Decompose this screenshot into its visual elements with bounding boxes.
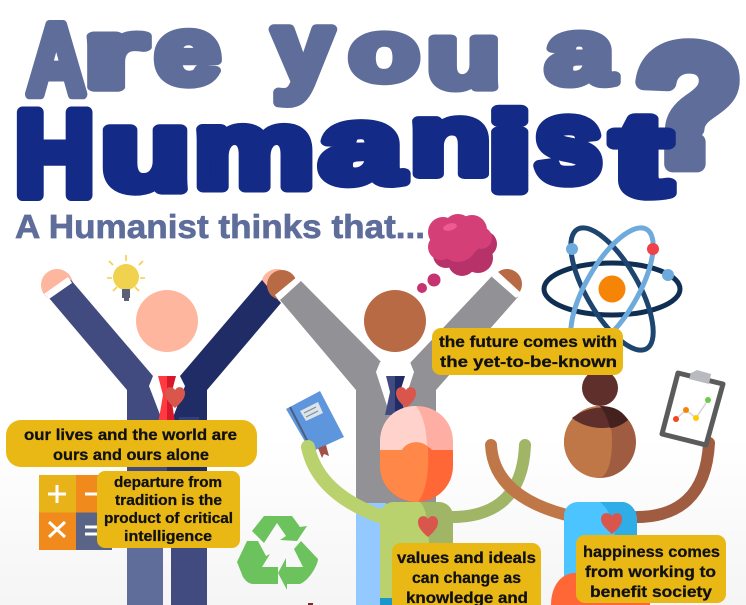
figure: woman with bun [491, 370, 709, 605]
title: Are you a Humanist?: t [613, 91, 670, 219]
heart [418, 516, 438, 537]
icon: light bulb [107, 255, 145, 301]
title: Are you a Humanist?: u [427, 5, 500, 107]
figure: person with orange beard [308, 406, 525, 605]
icon: clipboard [662, 370, 723, 445]
title: Are you a Humanist?: a [546, 1, 615, 102]
callout: happiness: benefit society [590, 584, 712, 601]
icon: recycling arrows [237, 516, 318, 590]
title: Are you a Humanist?: e [155, 0, 220, 103]
callout: our lives: ours and ours alone [53, 447, 209, 464]
callout: departure from tradition: intelligence [124, 528, 212, 545]
callout: our lives: our lives and the world are [24, 427, 237, 444]
heart [165, 387, 185, 408]
heart [396, 387, 416, 408]
title: Are you a Humanist?: m [194, 88, 314, 210]
callout: happiness [576, 535, 726, 603]
title: Are you a Humanist?: a [320, 86, 404, 205]
title: Are you a Humanist?: A [27, 5, 85, 116]
figure: man in navy suit [41, 269, 293, 605]
title: Are you a Humanist?: s [535, 77, 602, 205]
icon: thought cloud [417, 214, 497, 293]
callout: the future [432, 328, 623, 375]
title: Are you a Humanist?: o [349, 5, 419, 98]
callout: departure from tradition: tradition is the [115, 492, 222, 509]
title: Are you a Humanist?: H [15, 88, 94, 221]
subtitle: A Humanist thinks that... [15, 208, 425, 245]
title: Are you a Humanist? [15, 0, 741, 221]
callout: the future: the yet-to-be-known [440, 354, 617, 371]
callout: happiness: from working to [585, 564, 716, 581]
callout: values and ideals [392, 543, 541, 605]
callout: values and ideals: values and ideals [397, 550, 536, 567]
title: Are you a Humanist?: n [410, 83, 491, 195]
icon: calculator [39, 475, 112, 550]
callout: our lives [6, 420, 257, 467]
title: Are you a Humanist?: r [84, 0, 146, 107]
title: Are you a Humanist?: i [488, 90, 532, 214]
icon: book [286, 391, 344, 458]
callout: happiness: happiness comes [583, 544, 720, 561]
figure: man in grey suit [267, 269, 522, 605]
icon: atom [544, 216, 680, 362]
title: Are you a Humanist?: ? [636, 13, 741, 201]
dark speck [308, 603, 313, 605]
callout: departure from tradition [97, 471, 240, 548]
callout: the future: the future comes with [439, 334, 617, 351]
heart [601, 513, 622, 534]
title: Are you a Humanist?: u [101, 87, 190, 213]
callout: departure from tradition: product of critical [104, 510, 233, 527]
callout: departure from tradition: departure from [114, 474, 222, 491]
callout: values and ideals: can change as [412, 570, 521, 587]
